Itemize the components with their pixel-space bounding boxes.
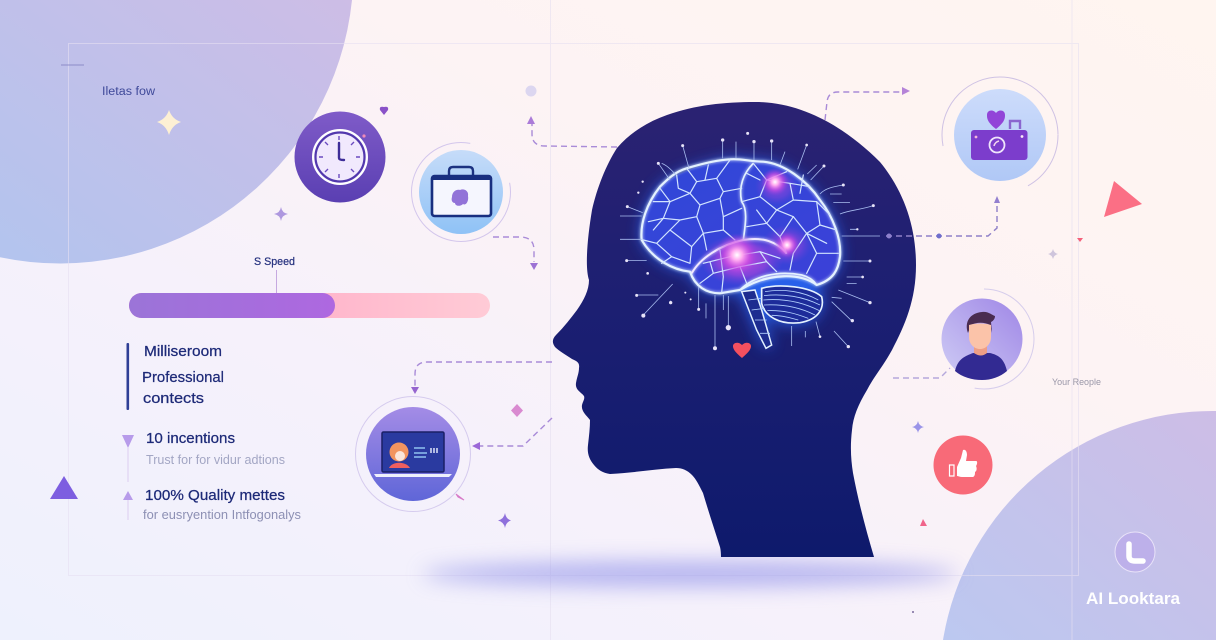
list item: 10 incentions: Trust for for vidur adtions — [146, 453, 285, 467]
dashed arrows — [411, 87, 1000, 450]
icon: person avatar — [934, 289, 1034, 389]
arrow: top right — [825, 87, 910, 120]
icon: laptop with support agent — [356, 396, 470, 512]
marker: pink tick — [456, 494, 464, 500]
list item: 10 incentions: 10 incentions — [146, 430, 235, 447]
brain glow — [641, 159, 840, 348]
text block: milliseroom professional contects: Professional — [142, 369, 224, 386]
label: your people: Your Reople — [1052, 377, 1101, 387]
brain highlights — [715, 168, 800, 277]
sparkle: pale — [1048, 249, 1058, 259]
progress bar — [129, 270, 490, 318]
list item: 100% quality — [123, 487, 301, 522]
decorative blob: top left — [0, 0, 352, 264]
arrow: to laptop side — [472, 418, 552, 450]
neural connectors — [620, 132, 880, 350]
arrow: to upper-left node — [527, 116, 617, 147]
icon: camera — [942, 77, 1058, 193]
heart: small red — [1077, 238, 1083, 242]
label: top left flow: Iletas fow — [102, 86, 156, 98]
triangle: violet — [50, 476, 78, 499]
ground shadow under head — [422, 561, 958, 587]
list item: 10 incentions — [122, 430, 285, 482]
icon: thumbs up — [934, 436, 992, 494]
text block: milliseroom professional contects: Milliseroom — [144, 343, 222, 360]
head silhouette — [553, 102, 916, 557]
dot: bottom — [912, 611, 914, 613]
sparkle: cream — [157, 110, 181, 135]
decorative blob: bottom right — [943, 411, 1216, 640]
red heart — [733, 343, 751, 358]
logo: AI Looktara — [1086, 590, 1181, 608]
brain illustration — [620, 132, 880, 358]
arrow: briefcase downward — [493, 237, 538, 270]
logo — [1086, 532, 1181, 608]
triangle: small pink — [920, 519, 927, 526]
text block: milliseroom professional contects — [126, 343, 224, 410]
sparkle: lilac left — [274, 207, 288, 221]
sparkle: periwinkle — [912, 421, 924, 433]
triangle: coral — [1104, 181, 1142, 217]
node: pale circle — [526, 86, 536, 96]
list item: 100% quality: 100% Quality mettes — [145, 487, 285, 504]
list item: 100% quality: for eusryention Intfogonalys — [143, 508, 301, 522]
icon: briefcase — [412, 142, 510, 242]
sparkle: violet — [498, 513, 511, 528]
sparkle: pink — [511, 404, 523, 417]
text block: milliseroom professional contects: contects — [143, 390, 204, 407]
heart: violet — [380, 107, 388, 115]
arrow: to laptop top — [411, 362, 552, 394]
label: speed: S Speed — [254, 256, 295, 268]
arrow: to person — [893, 368, 950, 378]
brain network — [641, 159, 840, 348]
arrow: to camera — [886, 196, 1000, 238]
icon: clock — [294, 112, 386, 202]
cerebellum and brainstem — [742, 286, 822, 348]
decorative shapes — [50, 86, 1142, 613]
